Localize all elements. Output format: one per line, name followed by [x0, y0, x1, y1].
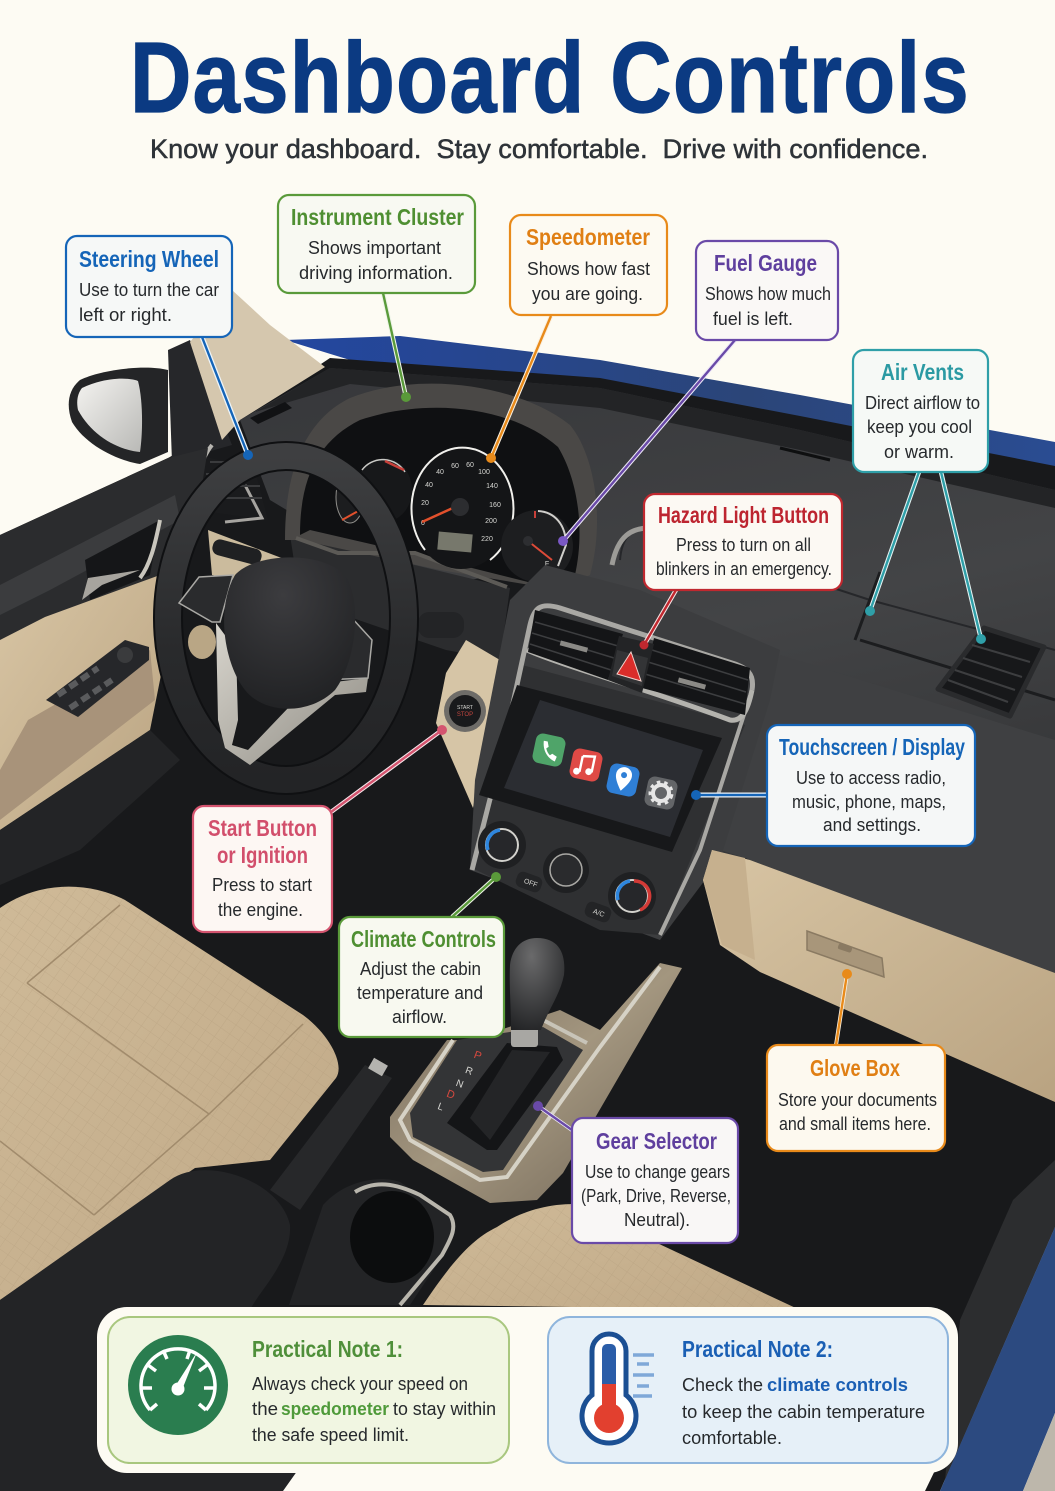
steering wheel [168, 456, 404, 780]
leader line: speedometer [486, 316, 551, 463]
callout: climate controls: airflow. [392, 1006, 447, 1027]
callout: climate controls: temperature and [357, 982, 483, 1003]
icon: thermometer [582, 1334, 654, 1443]
callout: instrument cluster: driving information. [299, 262, 453, 283]
note 1 card: the safe speed limit. [252, 1424, 409, 1445]
speedometer: 40 [436, 469, 444, 476]
gear console: R [464, 1065, 474, 1078]
title: Dashboard Controls [130, 21, 970, 134]
phone app icon [531, 732, 567, 768]
start panel [436, 640, 500, 808]
leader line: steering wheel [202, 337, 253, 460]
callout: touchscreen display [767, 725, 975, 846]
callout: steering wheel: left or right. [79, 304, 172, 325]
callout: gear selector: (Park, Drive, Reverse, [581, 1185, 731, 1206]
handbrake [270, 1058, 392, 1210]
callout: fuel gauge: Shows how much [705, 283, 831, 304]
subtitle: Know your dashboard. Stay comfortable. Drive with confidence. [150, 134, 928, 164]
icon: speedometer gauge [128, 1335, 228, 1435]
leader line: hazard light [640, 590, 676, 650]
callout: air vents [853, 350, 988, 472]
hazard light button [608, 636, 654, 693]
door panel [0, 448, 208, 885]
fuel gauge: F [545, 561, 549, 568]
callout: instrument cluster: Instrument Cluster [291, 204, 464, 230]
stalk trim [208, 530, 310, 595]
callout: hazard light button: Hazard Light Button [658, 502, 829, 528]
callout: fuel gauge [696, 241, 838, 340]
callout: gear selector [572, 1118, 738, 1243]
right seat [423, 1204, 800, 1310]
callout: gear selector: Gear Selector [596, 1128, 717, 1154]
gear console: P [472, 1049, 483, 1063]
side mirror [69, 368, 168, 464]
leader line: climate controls [452, 872, 501, 917]
speedometer: 60 [451, 463, 459, 470]
start button: STOP [457, 712, 473, 718]
callout: hazard light button: blinkers in an emergency. [656, 558, 832, 579]
fuel gauge [501, 510, 573, 582]
start button: START [457, 705, 473, 711]
gear console: L [436, 1101, 445, 1114]
car body blue roof edge [285, 336, 1055, 468]
callout: speedometer: Speedometer [526, 224, 650, 250]
glove box [703, 850, 1055, 1102]
speedometer: 60 [466, 462, 474, 469]
note 2 card: Check the [682, 1374, 763, 1395]
climate dials: OFF [523, 878, 538, 889]
dashboard top surface [240, 368, 1055, 975]
callout: start button or ignition: or Ignition [217, 842, 308, 868]
center stack [470, 565, 780, 940]
callout: glove box: Store your documents [778, 1089, 937, 1110]
callout: steering wheel [66, 236, 232, 337]
note 1 card: to stay within [393, 1398, 496, 1419]
note 2 card: comfortable. [682, 1427, 782, 1448]
note 2 card: Practical Note 2: [682, 1336, 833, 1362]
armrest [0, 1170, 305, 1491]
callout: gear selector: Use to change gears [585, 1161, 730, 1182]
note 1 card: speedometer [281, 1398, 389, 1419]
practical notes panel [97, 1307, 958, 1473]
speedometer: 140 [486, 483, 498, 490]
leader line: gear selector [533, 1101, 572, 1130]
touchscreen bezel [479, 685, 722, 852]
note 2 card [548, 1317, 948, 1463]
speedometer: 0 [421, 520, 425, 527]
callout: climate controls: Adjust the cabin [360, 958, 481, 979]
callout: gear selector: Neutral). [624, 1209, 690, 1230]
callout: touchscreen display: music, phone, maps, [792, 791, 946, 812]
start button [444, 690, 486, 732]
right air vent [938, 628, 1044, 716]
callout: air vents: Direct airflow to [865, 392, 980, 413]
beige patch behind wheel [188, 625, 216, 659]
settings app icon [643, 775, 679, 811]
left center vent [528, 610, 623, 680]
callout: climate controls [339, 917, 504, 1037]
callout: fuel gauge: fuel is left. [713, 308, 793, 329]
leader lines: air vents [865, 472, 986, 644]
callout: start button or ignition [193, 806, 332, 932]
callout: touchscreen display: Touchscreen / Display [779, 734, 965, 760]
music app icon [568, 747, 604, 783]
wiper stalk [211, 538, 263, 566]
leader line: instrument cluster [383, 293, 411, 402]
gear console: D [445, 1088, 456, 1102]
speedometer: 220 [481, 536, 493, 543]
note 1 card: Always check your speed on [252, 1373, 468, 1394]
cup holder [289, 1179, 455, 1305]
leader line: touchscreen [691, 790, 767, 800]
callout: start button or ignition: Start Button [208, 815, 317, 841]
leader line: start button [331, 725, 447, 812]
callout: glove box [767, 1045, 945, 1151]
leader line: glove box [836, 969, 852, 1045]
callout: speedometer: you are going. [532, 283, 643, 304]
callout: glove box: and small items here. [779, 1113, 931, 1134]
maps app icon [605, 762, 641, 798]
callout: hazard light button [644, 494, 842, 590]
callout: air vents: keep you cool [867, 416, 972, 437]
left seat [0, 887, 339, 1300]
note 1 card: Practical Note 1: [252, 1336, 403, 1362]
callout: touchscreen display: and settings. [823, 814, 921, 835]
callout: instrument cluster: Shows important [308, 237, 441, 258]
speedometer: 40 [425, 482, 433, 489]
callout: steering wheel: Use to turn the car [79, 279, 219, 300]
gear console: N [454, 1078, 465, 1091]
speedometer: 20 [421, 500, 429, 507]
lower dash strip [290, 535, 510, 660]
callout: fuel gauge: Fuel Gauge [714, 250, 817, 276]
callout: speedometer [510, 215, 667, 315]
leader line: fuel gauge [558, 340, 735, 546]
speedometer [410, 447, 513, 569]
tachometer [336, 458, 412, 523]
note 2 card: to keep the cabin temperature [682, 1401, 925, 1422]
callout: air vents: Air Vents [881, 359, 964, 385]
note 1 card: the [252, 1398, 278, 1419]
callout: glove box: Glove Box [810, 1055, 900, 1081]
climate dials: A/C [592, 908, 605, 919]
blue door sill [940, 1227, 1055, 1491]
left air vent [194, 445, 268, 522]
a-pillar [168, 340, 232, 462]
callout: air vents: or warm. [884, 441, 954, 462]
callout: start button or ignition: the engine. [218, 899, 303, 920]
speedometer: 200 [485, 518, 497, 525]
speedometer: 160 [489, 502, 501, 509]
note 2 card: climate controls [767, 1374, 908, 1395]
right stalk [418, 612, 464, 638]
gear console [390, 938, 682, 1203]
interior base [0, 358, 1055, 1491]
climate dials [478, 821, 656, 924]
callout: steering wheel: Steering Wheel [79, 246, 219, 272]
bottom cream strip [283, 1460, 940, 1491]
callout: hazard light button: Press to turn on all [676, 534, 811, 555]
right center vent [642, 638, 750, 715]
touchscreen display [504, 700, 703, 837]
right door sill trim [945, 1160, 1055, 1480]
callout: instrument cluster [278, 195, 475, 293]
callout: climate controls: Climate Controls [351, 926, 496, 952]
instrument cluster hood [285, 384, 597, 590]
note 1 card [108, 1317, 509, 1463]
callout: touchscreen display: Use to access radio, [796, 767, 946, 788]
speedometer: 100 [478, 469, 490, 476]
callout: speedometer: Shows how fast [527, 258, 650, 279]
callout: start button or ignition: Press to start [212, 874, 312, 895]
